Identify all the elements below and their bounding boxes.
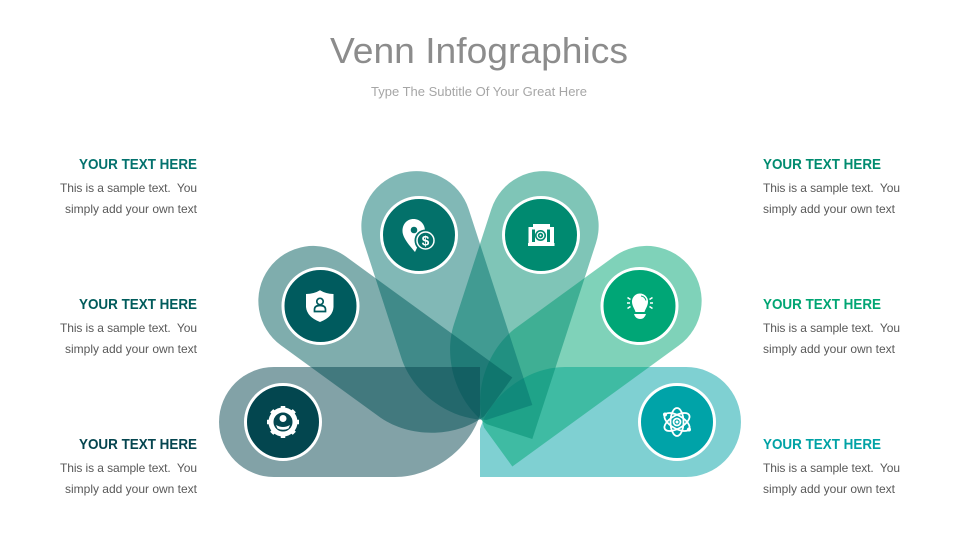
- title: Venn Infographics: [330, 30, 628, 71]
- text block: left top: This is a sample text. You: [60, 181, 197, 195]
- text block: left top: YOUR TEXT HERE: [79, 156, 197, 173]
- icon: gear with person: [246, 384, 320, 460]
- text block: right top: YOUR TEXT HERE: [763, 156, 881, 173]
- petal: middle right: [448, 224, 723, 466]
- text block: left top: [60, 156, 198, 216]
- text block: left top: simply add your own text: [65, 202, 198, 216]
- icon: atom: [640, 384, 714, 460]
- icon: location pin with dollar: [382, 198, 456, 272]
- text block: left middle: [60, 296, 198, 356]
- text block: right bottom: simply add your own text: [763, 482, 896, 496]
- subtitle: Type The Subtitle Of Your Great Here: [371, 84, 587, 99]
- text block: left bottom: [60, 436, 198, 496]
- icon: light bulb: [602, 268, 677, 344]
- text block: left middle: This is a sample text. You: [60, 321, 197, 335]
- text block: right middle: YOUR TEXT HERE: [763, 296, 881, 313]
- text block: right top: This is a sample text. You: [763, 181, 900, 195]
- text block: right middle: This is a sample text. You: [763, 321, 900, 335]
- text block: left bottom: simply add your own text: [65, 482, 198, 496]
- icon: shield with person: [283, 268, 358, 344]
- icon: camera: [504, 198, 578, 272]
- text block: left bottom: This is a sample text. You: [60, 461, 197, 475]
- text block: left middle: simply add your own text: [65, 342, 198, 356]
- text block: right middle: simply add your own text: [763, 342, 896, 356]
- text block: right bottom: This is a sample text. You: [763, 461, 900, 475]
- icon: location pin with dollar: $: [422, 234, 430, 248]
- text block: right middle: [763, 296, 900, 356]
- text block: right top: [763, 156, 900, 216]
- text block: right bottom: YOUR TEXT HERE: [763, 436, 881, 453]
- petal: bottom right: [480, 367, 741, 477]
- petal: bottom left: [219, 367, 480, 477]
- petal: top right: [428, 157, 613, 439]
- text block: right bottom: [763, 436, 900, 496]
- text block: left bottom: YOUR TEXT HERE: [79, 436, 197, 453]
- text block: left middle: YOUR TEXT HERE: [79, 296, 197, 313]
- venn petal fan: [219, 157, 741, 477]
- petal: middle left: [237, 224, 512, 466]
- petal: top left: [347, 157, 532, 439]
- text block: right top: simply add your own text: [763, 202, 896, 216]
